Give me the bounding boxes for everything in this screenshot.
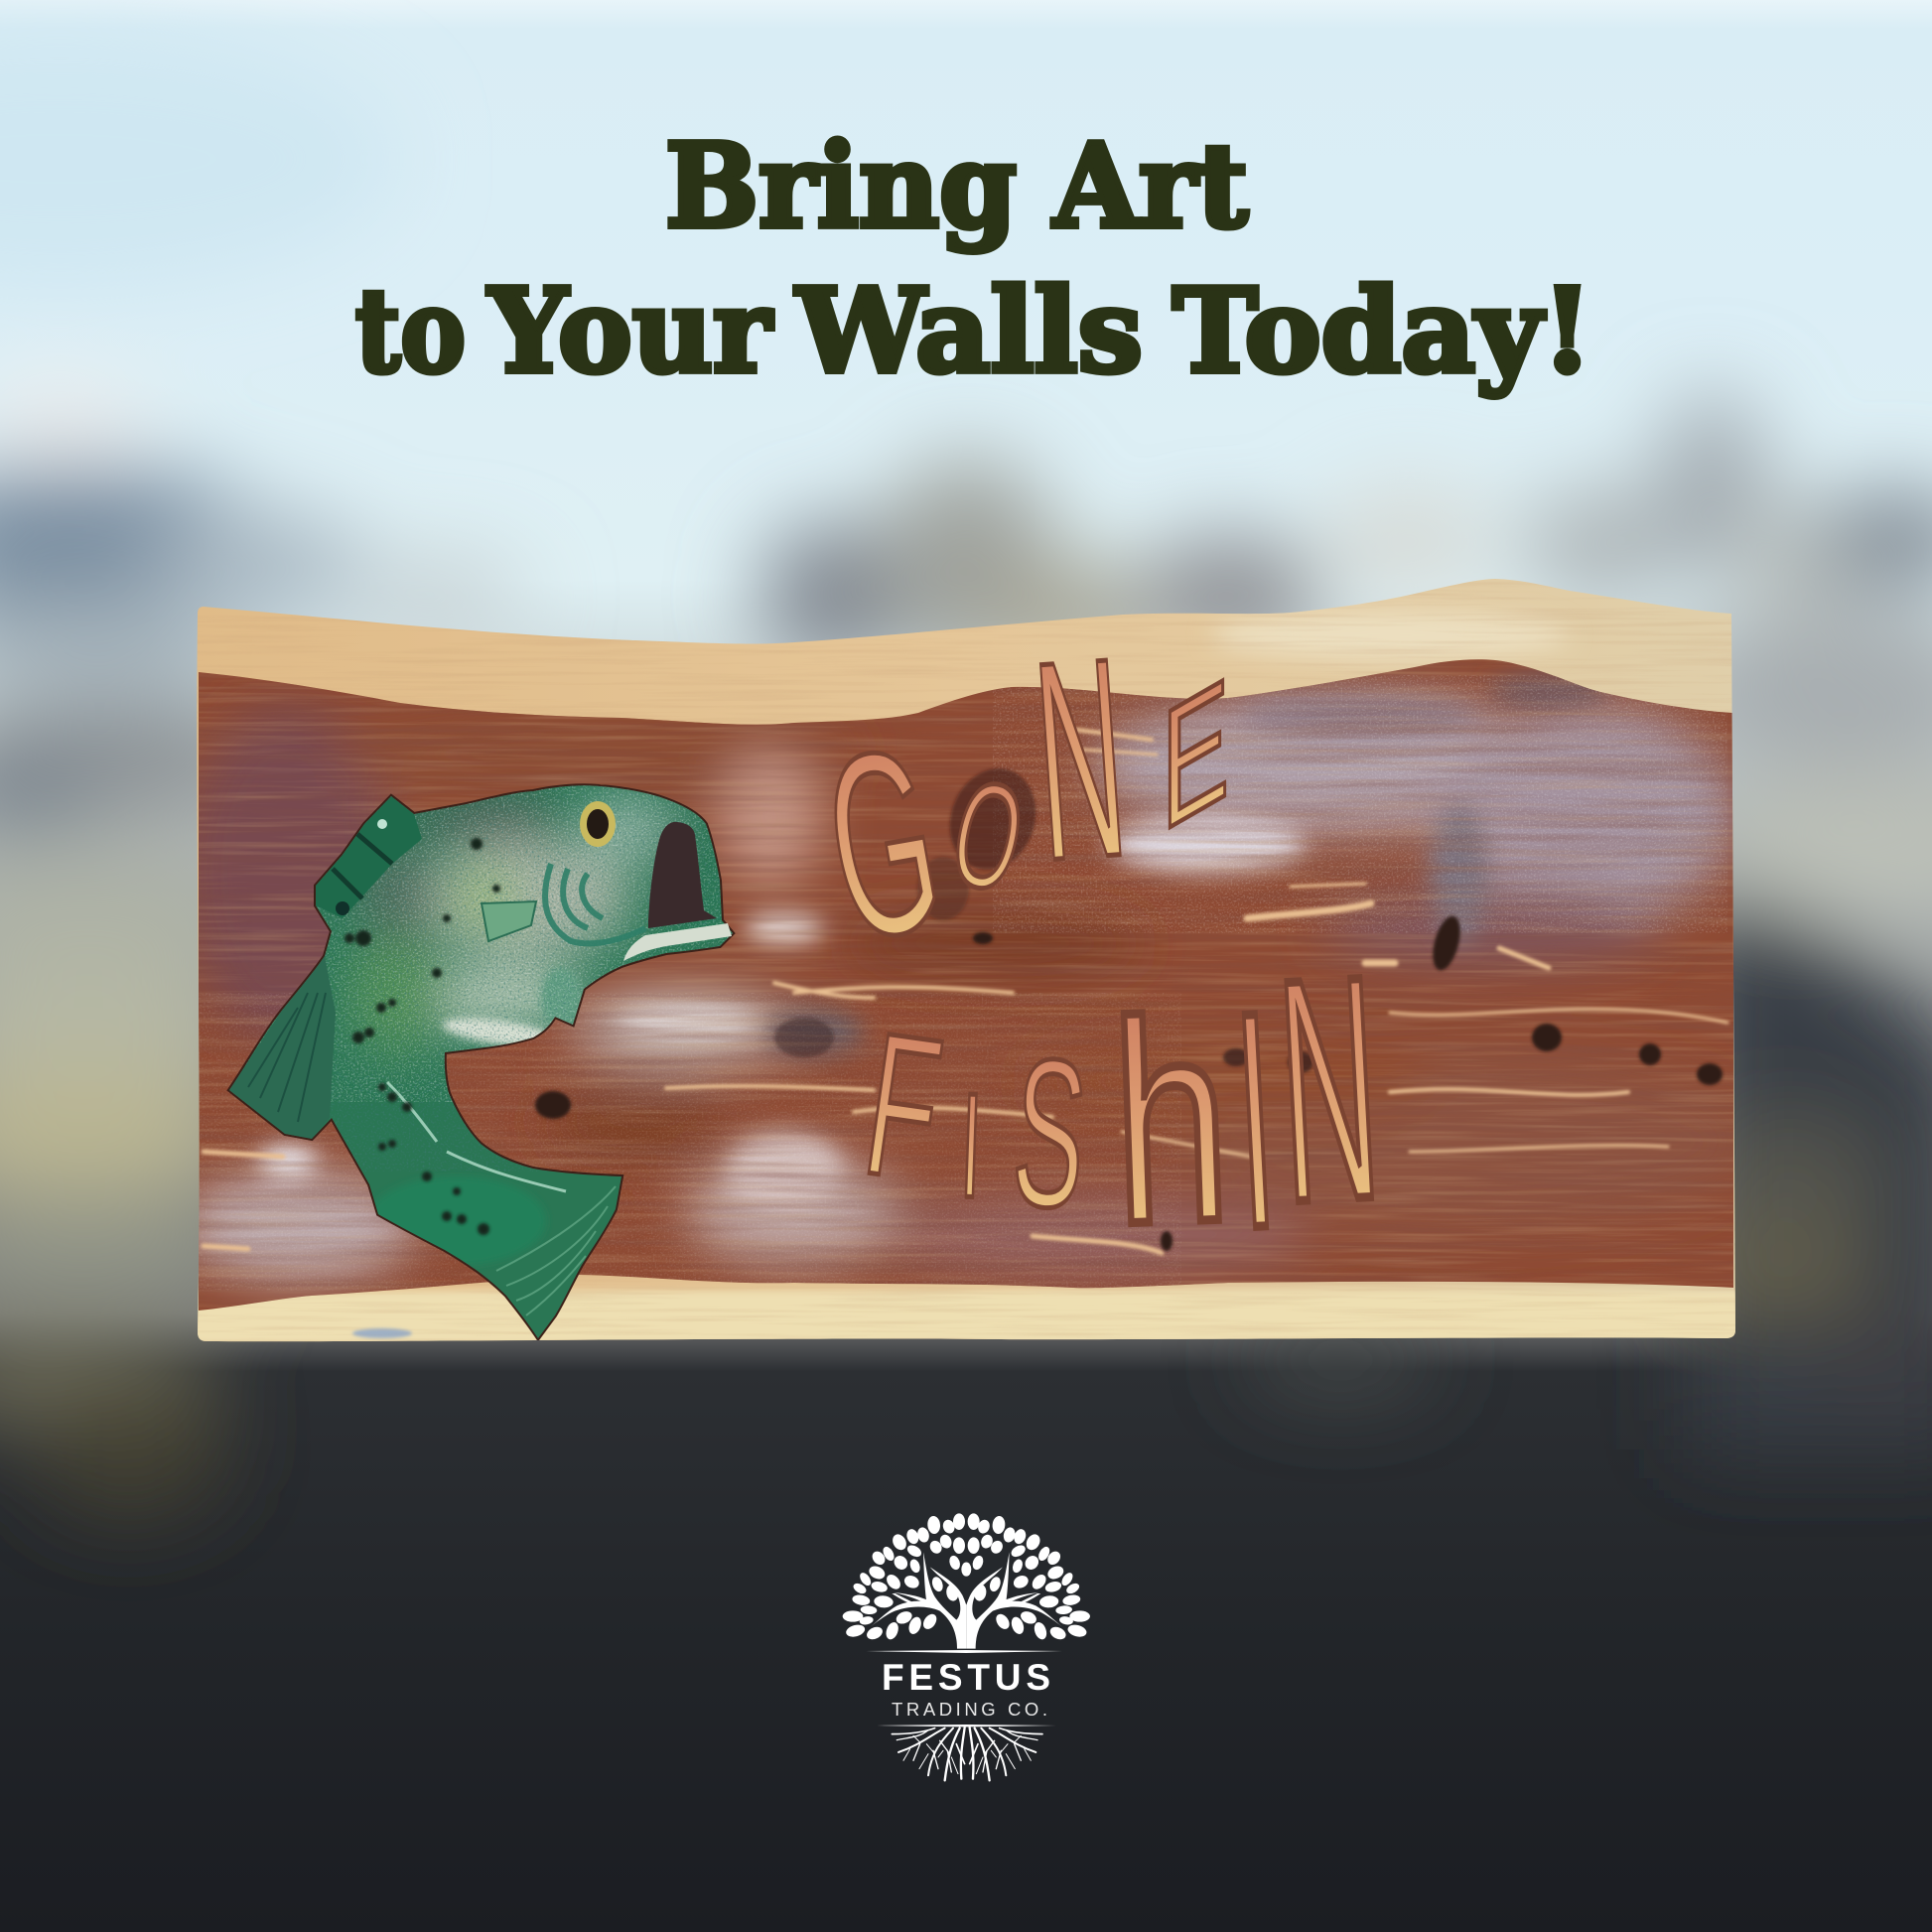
fish: lower jaw (623, 923, 732, 961)
fish: mouth (648, 822, 717, 928)
plaque: heartwood with grain (179, 645, 1757, 1311)
title: Walls (794, 264, 1143, 399)
carved text: Gone: O (939, 748, 1036, 924)
carved text: Fishin: F (854, 990, 953, 1225)
fish: gill arcs (545, 864, 645, 943)
carved text: Fishin: N (1272, 910, 1387, 1270)
title: Bring (665, 119, 1017, 254)
fish: rear fin (229, 956, 336, 1139)
fish: spots (345, 838, 500, 1235)
fish: carved shadow (229, 785, 733, 1338)
title: Art (1052, 119, 1248, 254)
carved text: Fishin: I (958, 1063, 985, 1230)
plaque: light grain streaks (204, 730, 1727, 1253)
logo: company name: FESTUS (882, 1657, 1050, 1698)
carved text: Gone (834, 657, 1227, 933)
fish: tail stripes (496, 1186, 616, 1315)
title (355, 119, 1592, 399)
plaque: knots (535, 757, 1723, 1251)
carved text: Fishin: I (1228, 948, 1283, 1293)
carved text: Fishin: h (1108, 958, 1234, 1285)
carved text: Fishin (868, 974, 1374, 1231)
logo: divider line (877, 1725, 1056, 1727)
logo: tagline: TRADING CO. (892, 1699, 1047, 1720)
title: to (355, 264, 466, 399)
carved text: Gone: G (808, 691, 958, 996)
carved text: Fishin: S (1007, 1013, 1093, 1253)
carved text: Gone: E (1162, 640, 1229, 868)
logo: tree (843, 1513, 1090, 1649)
fish: eye (580, 801, 616, 847)
title: Your (486, 264, 773, 399)
fish: pectoral fin (482, 901, 536, 941)
fish: dorsal fin (316, 796, 422, 918)
logo: roots (892, 1727, 1042, 1780)
plaque: sapwood (189, 566, 1747, 1360)
icon: leaping fish (218, 774, 745, 1350)
logo: ground line (866, 1650, 1062, 1653)
logo: Festus Trading Co. (843, 1513, 1090, 1780)
carved text: Gone: N (1027, 600, 1135, 920)
wooden plaque (179, 566, 1757, 1780)
title: Today! (1173, 264, 1592, 399)
